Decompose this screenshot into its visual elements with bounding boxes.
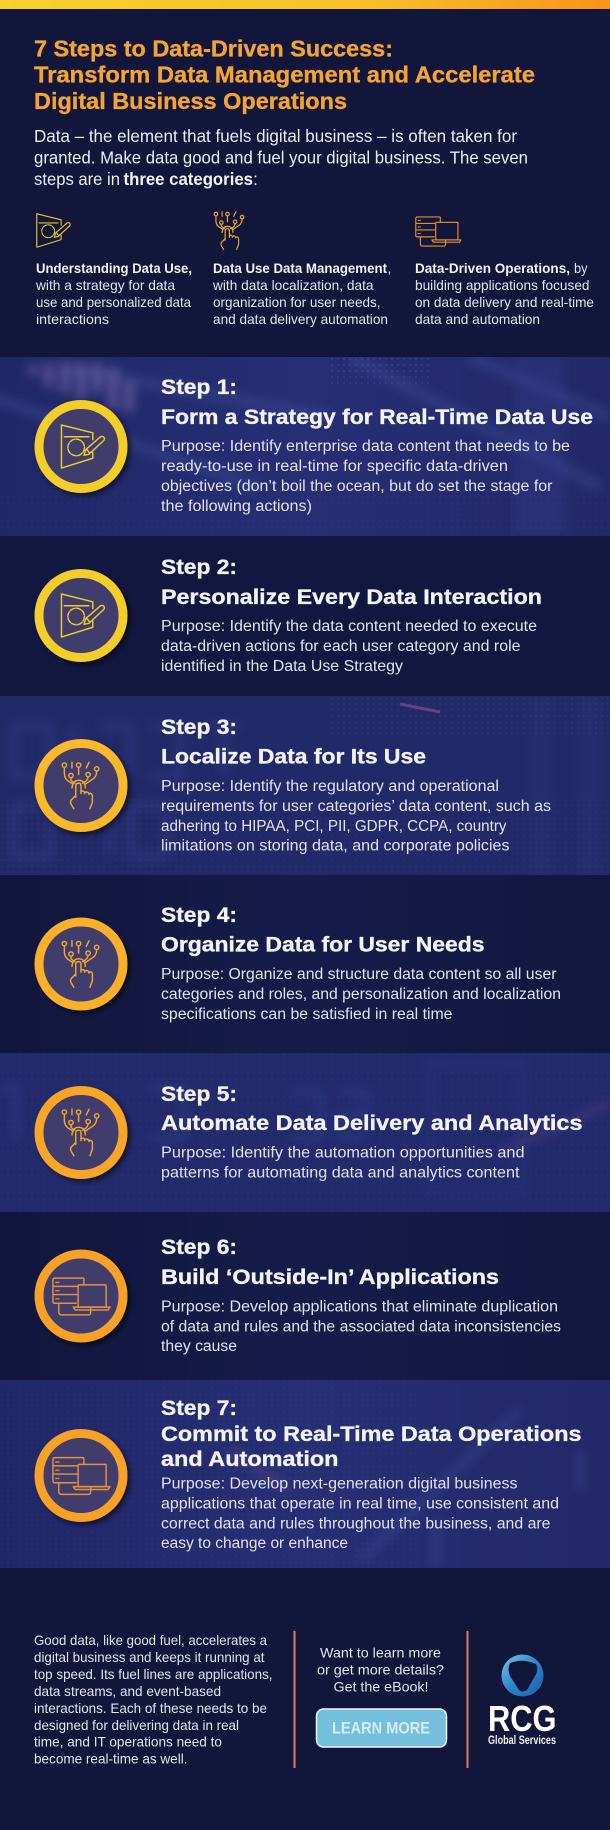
step 6 heading [161,1235,499,1289]
category text 3 [415,261,594,327]
step 3 heading: Localize Data for Its Use [161,744,426,768]
step 1 purpose: Purpose: Identify enterprise data content that needs to be [161,438,570,455]
category text 2: Data Use Data Management [213,261,387,276]
step 2 purpose: Purpose: Identify the data content needed to execute [161,618,537,635]
category text 2: organization for user needs, [213,295,380,310]
step 6 icon badge [39,1254,123,1338]
step 4 heading [161,903,485,956]
footer paragraph [34,1632,272,1766]
step 7 background [0,1380,610,1568]
step 1 heading [161,375,593,429]
icon: server and laptop [416,217,461,246]
category text 3: by [574,261,588,276]
step 3 background [0,696,610,875]
title [34,36,535,114]
call to action text: Want to learn more [320,1644,441,1660]
step 5 purpose [161,1144,524,1182]
logo: RCG Global Services: Global Services [488,1735,556,1747]
category text 1: use and personalized data [36,295,191,310]
step 7 purpose: easy to change or enhance [161,1535,348,1552]
divider right [466,1631,468,1768]
footer paragraph: Good data, like good fuel, accelerates a [34,1632,267,1648]
step 1 heading: Step 1: [161,375,237,399]
panel: step 6 [0,1212,610,1380]
category text 3: building applications focused [415,278,590,293]
step 6 purpose: they cause [161,1338,237,1355]
step 2 heading [161,555,542,609]
panel: step 5 [0,1053,610,1212]
step 6 background [0,1212,610,1380]
step 4 heading: Step 4: [161,903,237,927]
footer paragraph: interactions. Each of these needs to be [34,1700,267,1716]
step 2 heading: Step 2: [161,555,237,579]
step 7 heading: Step 7: [161,1396,237,1420]
category text 2: and data delivery automation [213,312,388,327]
step 1 purpose: objectives (don’t boil the ocean, but do set the stage for [161,478,552,495]
intro text: steps are in [34,169,120,189]
step 4 heading: Organize Data for User Needs [161,932,485,956]
step 6 heading: Build ‘Outside-In’ Applications [161,1265,499,1289]
step 2 background [0,536,610,696]
category text 1 [35,261,192,327]
step 6 purpose: Purpose: Develop applications that eliminate duplication [161,1298,558,1316]
step 3 heading: Step 3: [161,715,237,739]
panel: step 3 [0,696,610,875]
step 5 background [0,1053,610,1212]
step 5 purpose: patterns for automating data and analytics content [161,1164,520,1182]
panel: step 4 [0,875,610,1053]
step 5 icon badge [39,1090,123,1174]
icon: strategy [37,214,70,247]
category text 3: Data-Driven Operations, [415,261,570,276]
learn more button [316,1709,446,1747]
call to action text [317,1644,444,1694]
intro text: three categories [124,169,253,189]
step 7 heading [161,1396,582,1471]
divider left [294,1631,296,1768]
step 4 purpose: categories and roles, and personalization and localization [161,986,561,1003]
step 3 purpose: Purpose: Identify the regulatory and operational [161,778,499,795]
step 2 purpose [161,618,537,675]
footer paragraph: designed for delivering data in real [34,1717,239,1733]
step 2 purpose: identified in the Data Use Strategy [161,658,403,675]
step 7 heading: Commit to Real-Time Data Operations [161,1422,582,1446]
category text 1: with a strategy for data [35,278,175,293]
step 1 purpose: the following actions) [161,498,312,515]
logo: RCG Global Services: RCG [488,1698,556,1739]
step 4 icon badge [39,922,123,1006]
step 7 purpose: correct data and rules throughout the business, and are [161,1516,550,1532]
footer paragraph: data streams, and event-based [34,1683,221,1699]
step 2 purpose: data-driven actions for each user category and role [161,638,520,655]
footer paragraph: top speed. Its fuel lines are applications, [34,1666,272,1682]
category text 2: with data localization, data [212,278,374,293]
category text 1: interactions [36,312,109,327]
logo: RCG Global Services [488,1654,556,1747]
footer paragraph: time, and IT operations need to [34,1734,222,1750]
step 6 heading: Step 6: [161,1235,237,1259]
top gradient bar [0,0,610,9]
learn more button: LEARN MORE [332,1720,430,1738]
step 5 heading [161,1082,583,1135]
step 5 purpose: Purpose: Identify the automation opportunities and [161,1144,524,1162]
intro text: granted. Make data good and fuel your digital business. The seven [34,148,528,168]
panel: step 1 [0,357,610,536]
icon: hand with data nodes [214,212,244,249]
step 3 purpose: requirements for user categories’ data content, such as [161,798,551,815]
step 3 icon badge [39,744,123,828]
panel: step 7 [0,1380,610,1568]
step 4 purpose [161,966,561,1023]
step 5 heading: Automate Data Delivery and Analytics [161,1111,583,1135]
step 3 purpose: adhering to HIPAA, PCI, PII, GDPR, CCPA, country [161,818,507,835]
step 6 purpose: of data and rules and the associated data inconsistencies [161,1318,561,1336]
call to action text: or get more details? [317,1662,444,1678]
footer paragraph: become real-time as well. [34,1750,188,1766]
step 7 heading: and Automation [161,1447,338,1471]
step 7 purpose: applications that operate in real time, use consistent and [161,1496,559,1512]
step 7 purpose: Purpose: Develop next-generation digital business [161,1476,518,1492]
category text 2: , [388,261,391,276]
step 1 background [0,357,610,536]
panel: step 2 [0,536,610,696]
step 1 purpose [161,438,570,515]
category: data use data management [212,212,391,327]
title: 7 Steps to Data-Driven Success: [34,36,393,62]
footer paragraph: digital business and keeps it running at [34,1649,265,1665]
step 1 purpose: ready-to-use in real-time for specific data-driven [161,458,508,475]
step 1 icon badge [39,404,123,488]
logo ring mark [502,1654,544,1696]
step 3 purpose: limitations on storing data, and corporate policies [161,838,510,854]
intro text: : [253,169,258,189]
step 6 purpose [161,1298,561,1355]
title: Transform Data Management and Accelerate [34,62,535,88]
category: understanding data use [35,214,192,327]
intro text [34,126,528,189]
step 4 purpose: Purpose: Organize and structure data content so all user [161,966,556,983]
step 7 icon badge [39,1434,123,1518]
category text 1: Understanding Data Use, [36,261,192,276]
step 2 icon badge [39,574,123,658]
step 1 heading: Form a Strategy for Real-Time Data Use [161,405,593,429]
category: data-driven operations [415,217,594,327]
step 3 heading [161,715,426,768]
step 5 heading: Step 5: [161,1082,237,1106]
step 4 purpose: specifications can be satisfied in real time [161,1006,452,1023]
title: Digital Business Operations [34,88,347,114]
category text 2 [212,261,391,327]
step 2 heading: Personalize Every Data Interaction [161,585,542,609]
call to action text: Get the eBook! [334,1678,428,1694]
category text 3: data and automation [415,312,540,327]
step 7 purpose [161,1476,559,1552]
step 3 purpose [161,778,551,854]
step 4 background [0,875,610,1053]
category text 3: on data delivery and real-time [415,295,594,310]
intro text: Data – the element that fuels digital business – is often taken for [34,126,517,146]
